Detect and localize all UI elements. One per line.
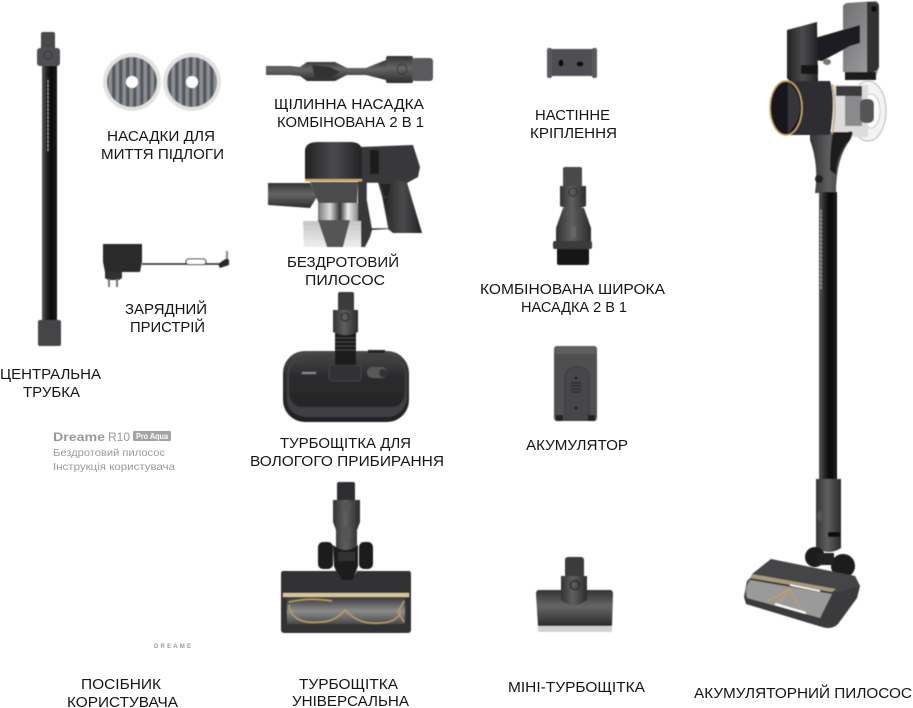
label: floor mop pads: МИТТЯ ПІДЛОГИ (101, 146, 224, 163)
label: central tube (0, 366, 101, 401)
manual booklet cover text: Бездротовий пилосос (53, 447, 165, 459)
charger (103, 244, 229, 287)
manual booklet cover text (53, 430, 175, 473)
nozzle (268, 183, 317, 208)
motor (786, 81, 833, 135)
wheels (805, 547, 825, 567)
crevice tool 2 in 1 (266, 56, 433, 83)
wall plate (843, 1, 879, 80)
label: universal turbo brush (292, 676, 409, 708)
label: charger: ПРИСТРІЙ (130, 318, 205, 336)
label: wide nozzle: КОМБІНОВАНА ШИРОКА (480, 281, 665, 298)
label: charger: ЗАРЯДНИЙ (125, 300, 207, 318)
label: crevice tool: КОМБІНОВАНА 2 В 1 (277, 114, 424, 131)
label: wet turbo brush: ВОЛОГОГО ПРИБИРАННЯ (250, 453, 444, 470)
arm (815, 25, 860, 61)
label: cordless vacuum (287, 253, 399, 289)
label: wall mount: КРІПЛЕННЯ (530, 125, 617, 142)
central tube (37, 32, 61, 346)
label: battery: АКУМУЛЯТОР (526, 437, 628, 454)
neck (810, 131, 853, 193)
floor mop pads (103, 53, 221, 111)
label: user manual: ПОСІБНИК (81, 676, 161, 693)
label: wall mount: НАСТІННЕ (535, 107, 610, 124)
label: crevice tool (274, 96, 424, 131)
mini turbo brush (536, 557, 613, 632)
label: wide nozzle: НАСАДКА 2 В 1 (521, 299, 627, 316)
floor head (744, 559, 860, 628)
cordless stick vacuum on wall mount (744, 1, 886, 628)
label: cordless vacuum: АКУМУЛЯТОРНИЙ ПИЛОСОС (694, 684, 912, 702)
handle (787, 22, 818, 82)
manual booklet cover text: Pro Aqua (136, 432, 168, 441)
wet cleaning turbo brush (283, 292, 409, 422)
label: wet turbo brush: ТУРБОЩІТКА ДЛЯ (280, 435, 411, 452)
bin (303, 221, 361, 247)
label: floor mop pads: НАСАДКИ ДЛЯ (107, 128, 215, 145)
label: crevice tool: ЩІЛИННА НАСАДКА (274, 96, 424, 113)
label: wide nozzle (480, 281, 665, 316)
handle and frame (358, 145, 422, 247)
label: wet turbo brush (250, 435, 444, 470)
universal turbo brush (281, 482, 411, 633)
label: floor mop pads (101, 128, 224, 163)
label: user manual (67, 676, 178, 708)
wall mount (547, 48, 597, 78)
clear dust bin (850, 81, 886, 141)
battery (554, 346, 597, 421)
label: universal turbo brush: ТУРБОЩІТКА (299, 676, 398, 693)
main tube (819, 192, 837, 479)
manual booklet cover text: R10 (108, 430, 130, 444)
mid (310, 182, 358, 204)
label: charger (125, 300, 207, 336)
cordless handheld vacuum (268, 142, 422, 247)
label: central tube: ТРУБКА (23, 384, 80, 401)
manual booklet cover text: Dreame (53, 430, 105, 444)
manual logo: DREAME (154, 644, 191, 650)
label: cordless vacuum: БЕЗДРОТОВИЙ (287, 253, 399, 271)
dome (305, 142, 362, 180)
lower sleeve (816, 479, 841, 552)
manual booklet cover text: Інструкція користувача (53, 461, 175, 473)
label: central tube: ЦЕНТРАЛЬНА (0, 366, 101, 383)
label: mini turbo brush: МІНІ-ТУРБОЩІТКА (508, 679, 645, 696)
label: wall mount (530, 107, 617, 142)
wide combination nozzle 2 in 1 (553, 167, 592, 265)
label: cordless vacuum: ПИЛОСОС (305, 272, 385, 289)
